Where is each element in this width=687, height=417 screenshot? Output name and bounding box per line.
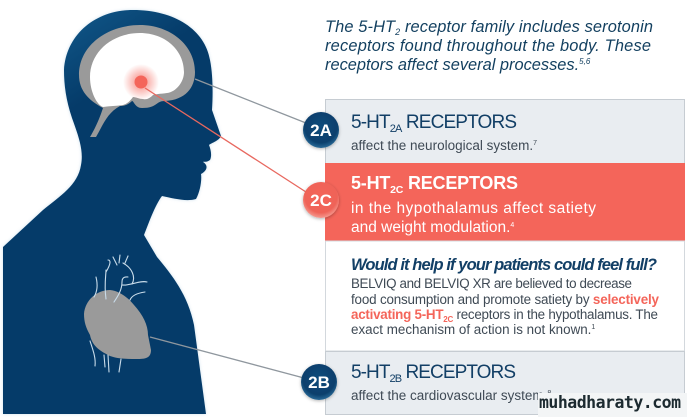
panel: 2A receptors	[326, 100, 684, 164]
panel: 2C receptors	[325, 163, 685, 241]
badge: 2C: 2C	[310, 191, 332, 210]
panel: 2B receptors	[326, 352, 684, 414]
2A heading: RECEPTORS	[402, 112, 517, 133]
badge: 2C	[303, 182, 339, 218]
hypothalamus highlight	[123, 64, 159, 100]
2C heading: 2C	[390, 184, 404, 196]
2C description: and weight modulation.	[351, 219, 510, 236]
question body: BELVIQ and BELVIQ XR are believed to decrease	[351, 276, 632, 291]
badge: 2A: 2A	[310, 121, 332, 140]
intro text: receptors found throughout the body. These	[325, 37, 651, 55]
connector: 2B	[150, 337, 304, 378]
question body	[351, 276, 660, 337]
2B heading: RECEPTORS	[401, 362, 516, 383]
2C description: in the hypothalamus affect satiety	[351, 200, 596, 217]
intro text	[325, 18, 653, 74]
heart vessels	[90, 255, 147, 372]
2C description: 4	[510, 222, 514, 229]
2B description: 8	[547, 390, 551, 397]
2A heading: 5-HT	[351, 112, 391, 133]
question body: activating 5-HT	[351, 307, 444, 322]
connector: 2A	[195, 79, 306, 123]
2B heading: 5-HT	[351, 362, 390, 383]
watermark: muhadharaty.com	[539, 393, 681, 412]
connector: 2C	[145, 88, 306, 192]
2C heading: 5-HT	[351, 173, 390, 193]
intro text: 2	[394, 27, 400, 37]
head and torso silhouette	[3, 10, 221, 414]
intro text: receptors affect several processes.	[325, 56, 579, 74]
2A heading: 2A	[390, 123, 403, 135]
2B description: affect the cardiovascular system.	[351, 388, 547, 403]
question heading: Would it help if your patients could feel full?	[351, 256, 657, 274]
question body: receptors in the hypothalamus. The	[453, 307, 658, 322]
intro text: 5,6	[579, 57, 591, 66]
2B heading: 2B	[390, 373, 402, 385]
panel: patient question	[326, 241, 684, 351]
2C description	[351, 200, 596, 236]
badge: 2A	[303, 112, 339, 148]
badge: 2B: 2B	[308, 373, 330, 392]
question body: exact mechanism of action is not known.	[351, 322, 591, 337]
intro text: The 5-HT	[325, 18, 395, 36]
2C heading: RECEPTORS	[403, 173, 518, 193]
2A description: affect the neurological system.	[351, 138, 533, 153]
question body: 1	[591, 324, 595, 331]
2A description: 7	[533, 140, 537, 147]
intro text: receptor family includes serotonin	[400, 18, 653, 36]
question body: 2C	[443, 315, 453, 324]
badge: 2B	[301, 364, 337, 400]
heart	[84, 255, 151, 372]
brain	[79, 25, 195, 137]
question body: food consumption and promote satiety by selectively	[351, 292, 660, 307]
